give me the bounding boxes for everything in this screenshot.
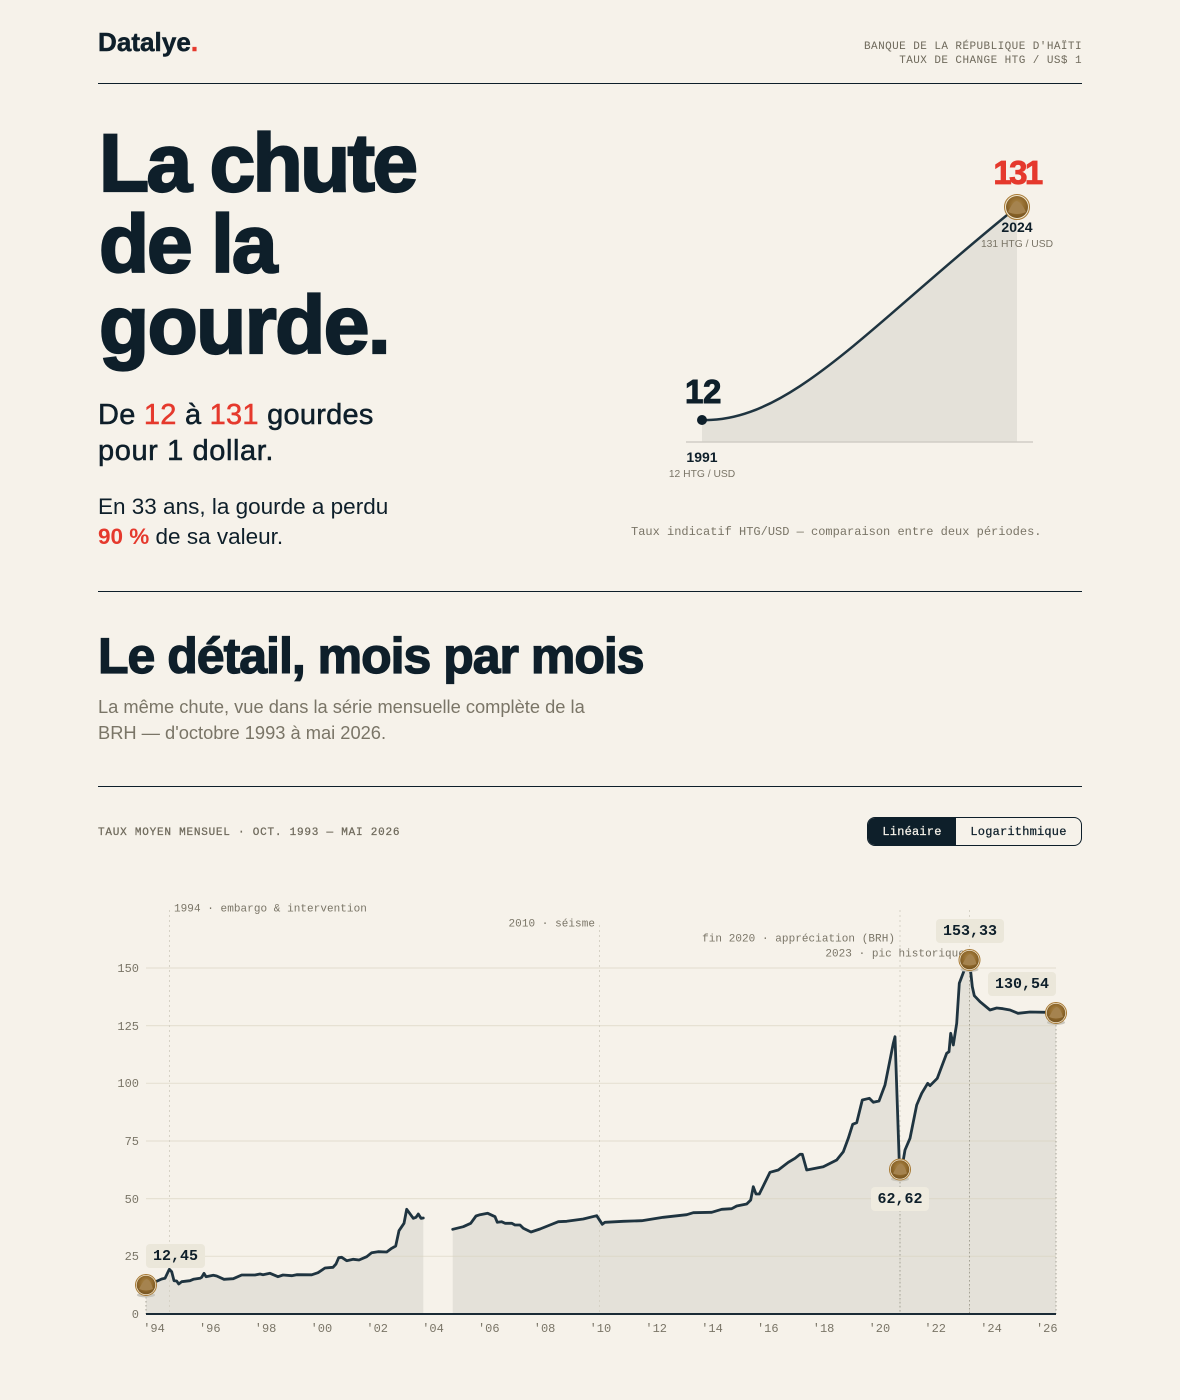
- coin 1993: [136, 1274, 156, 1298]
- y axis labels: 25: [125, 1250, 139, 1264]
- chart heading: TAUX MOYEN MENSUEL · OCT. 1993 — MAI 2026: [98, 827, 400, 839]
- y axis labels: 125: [117, 1020, 139, 1034]
- callout 153,33: 153,33: [943, 923, 997, 940]
- x axis labels: '22: [924, 1322, 946, 1336]
- toggle: linear: Linéaire: [882, 825, 942, 839]
- x axis labels: '00: [311, 1322, 332, 1336]
- line series: [146, 963, 1056, 1285]
- area under curve: [702, 207, 1017, 442]
- toggle: linear: [868, 818, 956, 845]
- title: de la: [99, 199, 275, 290]
- label 1991: 1991: [686, 449, 718, 465]
- x axis labels: '96: [199, 1322, 221, 1336]
- scale toggle: [867, 817, 1082, 846]
- x axis labels: '04: [422, 1322, 444, 1336]
- grid lines: [146, 968, 1056, 1256]
- section intro: [98, 696, 585, 743]
- x axis labels: [143, 1322, 1058, 1336]
- x axis labels: '14: [701, 1322, 723, 1336]
- point drop lines: [146, 960, 1056, 1314]
- annotations: fin 2020 · appréciation (BRH): [702, 934, 895, 946]
- annotations: 2023 · pic historique: [825, 948, 965, 960]
- x axis labels: '10: [590, 1322, 611, 1336]
- summary text: 90 % de sa valeur.: [98, 524, 283, 549]
- x axis labels: '02: [366, 1322, 388, 1336]
- annotations: [174, 904, 965, 960]
- summary text: [98, 494, 388, 549]
- section intro: BRH — d'octobre 1993 à mai 2026.: [98, 722, 386, 743]
- area: [146, 963, 1056, 1314]
- coin 2023: [959, 950, 980, 972]
- x axis labels: '06: [478, 1322, 500, 1336]
- section intro: La même chute, vue dans la série mensuelle complète de la: [98, 696, 585, 717]
- end value 131: 131: [993, 154, 1043, 191]
- source header: BANQUE DE LA RÉPUBLIQUE D'HAÏTI: [864, 41, 1082, 53]
- callout 62,62: [871, 1187, 929, 1211]
- annotations: 2010 · séisme: [509, 918, 595, 930]
- coin 2020: [890, 1159, 910, 1182]
- x axis labels: '24: [980, 1322, 1002, 1336]
- callout 62,62: 62,62: [877, 1191, 923, 1208]
- annotations: 1994 · embargo & intervention: [174, 904, 367, 916]
- y axis labels: 150: [117, 962, 139, 976]
- x axis labels: '18: [813, 1322, 834, 1336]
- y axis labels: 75: [125, 1135, 139, 1149]
- source header: [864, 40, 1082, 67]
- coin 2024: [1004, 194, 1030, 220]
- subtitle: De 12 à 131 gourdes: [98, 399, 374, 431]
- coin 2026: [1046, 1002, 1066, 1025]
- title: gourde.: [99, 280, 389, 371]
- x axis labels: '20: [869, 1322, 890, 1336]
- hero chart: 12 to 131: [669, 154, 1053, 480]
- title: [99, 118, 416, 372]
- callout 12,45: [146, 1244, 205, 1268]
- start value 12: 12: [685, 373, 721, 410]
- subtitle: pour 1 dollar.: [98, 435, 274, 467]
- label 2024: 2024: [1001, 219, 1033, 235]
- section heading: Le détail, mois par mois: [98, 628, 644, 684]
- logo: Datalye.: [98, 27, 198, 57]
- summary text: En 33 ans, la gourde a perdu: [98, 494, 388, 519]
- event markers: [170, 910, 970, 1314]
- subtitle: [98, 399, 374, 467]
- x axis: [146, 1313, 1056, 1315]
- y axis labels: 0: [132, 1308, 139, 1322]
- x axis labels: '26: [1036, 1322, 1058, 1336]
- y axis labels: 50: [125, 1193, 139, 1207]
- y axis labels: [117, 962, 139, 1322]
- source header: TAUX DE CHANGE HTG / US$ 1: [899, 55, 1082, 67]
- callout 12,45: 12,45: [153, 1248, 198, 1265]
- x axis labels: '94: [143, 1322, 165, 1336]
- x axis labels: '08: [534, 1322, 555, 1336]
- label 131 HTG: 131 HTG / USD: [981, 239, 1053, 250]
- x axis labels: '12: [645, 1322, 667, 1336]
- monthly line chart: [117, 904, 1067, 1336]
- curve: [702, 207, 1017, 420]
- x axis labels: '16: [757, 1322, 779, 1336]
- hero chart caption: Taux indicatif HTG/USD — comparaison entre deux périodes.: [631, 525, 1041, 539]
- y axis labels: 100: [117, 1077, 139, 1091]
- label 12 HTG: 12 HTG / USD: [669, 469, 735, 480]
- start point: [697, 415, 707, 425]
- callout 153,33: [936, 919, 1004, 943]
- toggle: log: Logarithmique: [970, 825, 1067, 839]
- x axis labels: '98: [255, 1322, 276, 1336]
- callout 130,54: [988, 972, 1056, 996]
- callout 130,54: 130,54: [995, 976, 1049, 993]
- title: La chute: [99, 118, 415, 209]
